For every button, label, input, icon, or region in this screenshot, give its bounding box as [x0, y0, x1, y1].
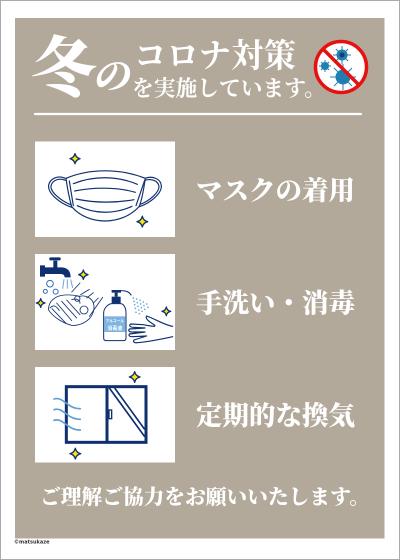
- label: mask: マスクの着用: [196, 176, 355, 206]
- icon: faucet: [40, 257, 73, 294]
- icon: alcohol bottle: [104, 290, 131, 341]
- icon: sparkle: [36, 299, 45, 307]
- panel: handwashing illustration: [35, 254, 175, 350]
- icon: washing hands: [48, 283, 103, 325]
- panel: mask illustration: [35, 142, 175, 237]
- icon: alcohol bottle: 消毒液: [107, 325, 122, 332]
- title: コロナ対策: [134, 38, 296, 75]
- icon: sparkle: [70, 448, 81, 459]
- icon: no virus sign: [316, 42, 366, 92]
- title: 冬: [31, 33, 97, 106]
- panel: window illustration: [35, 367, 175, 462]
- icon: wind: [54, 399, 80, 430]
- icon: sparkle: [129, 372, 140, 382]
- icon: window: [66, 387, 146, 442]
- title: の: [92, 57, 132, 98]
- icon: sparkle: [70, 154, 80, 164]
- copyright: ©matsukaze: [14, 540, 50, 546]
- icon: sparkle: [79, 270, 88, 279]
- icon: open hand: [129, 316, 173, 343]
- icon: sparkle: [137, 216, 148, 227]
- title: を実施しています。: [132, 76, 326, 101]
- icon: sparkle: [162, 307, 171, 316]
- icon: face mask: [49, 171, 161, 221]
- title: [31, 33, 326, 106]
- icon: spray mist: [132, 297, 149, 314]
- icon: alcohol bottle: アルコール: [106, 318, 124, 323]
- label: ventilation: 定期的な換気: [196, 401, 355, 431]
- closing message: ご理解ご協力をお願いいたします。: [40, 485, 370, 509]
- label: handwashing: 手洗い・消毒: [196, 288, 355, 318]
